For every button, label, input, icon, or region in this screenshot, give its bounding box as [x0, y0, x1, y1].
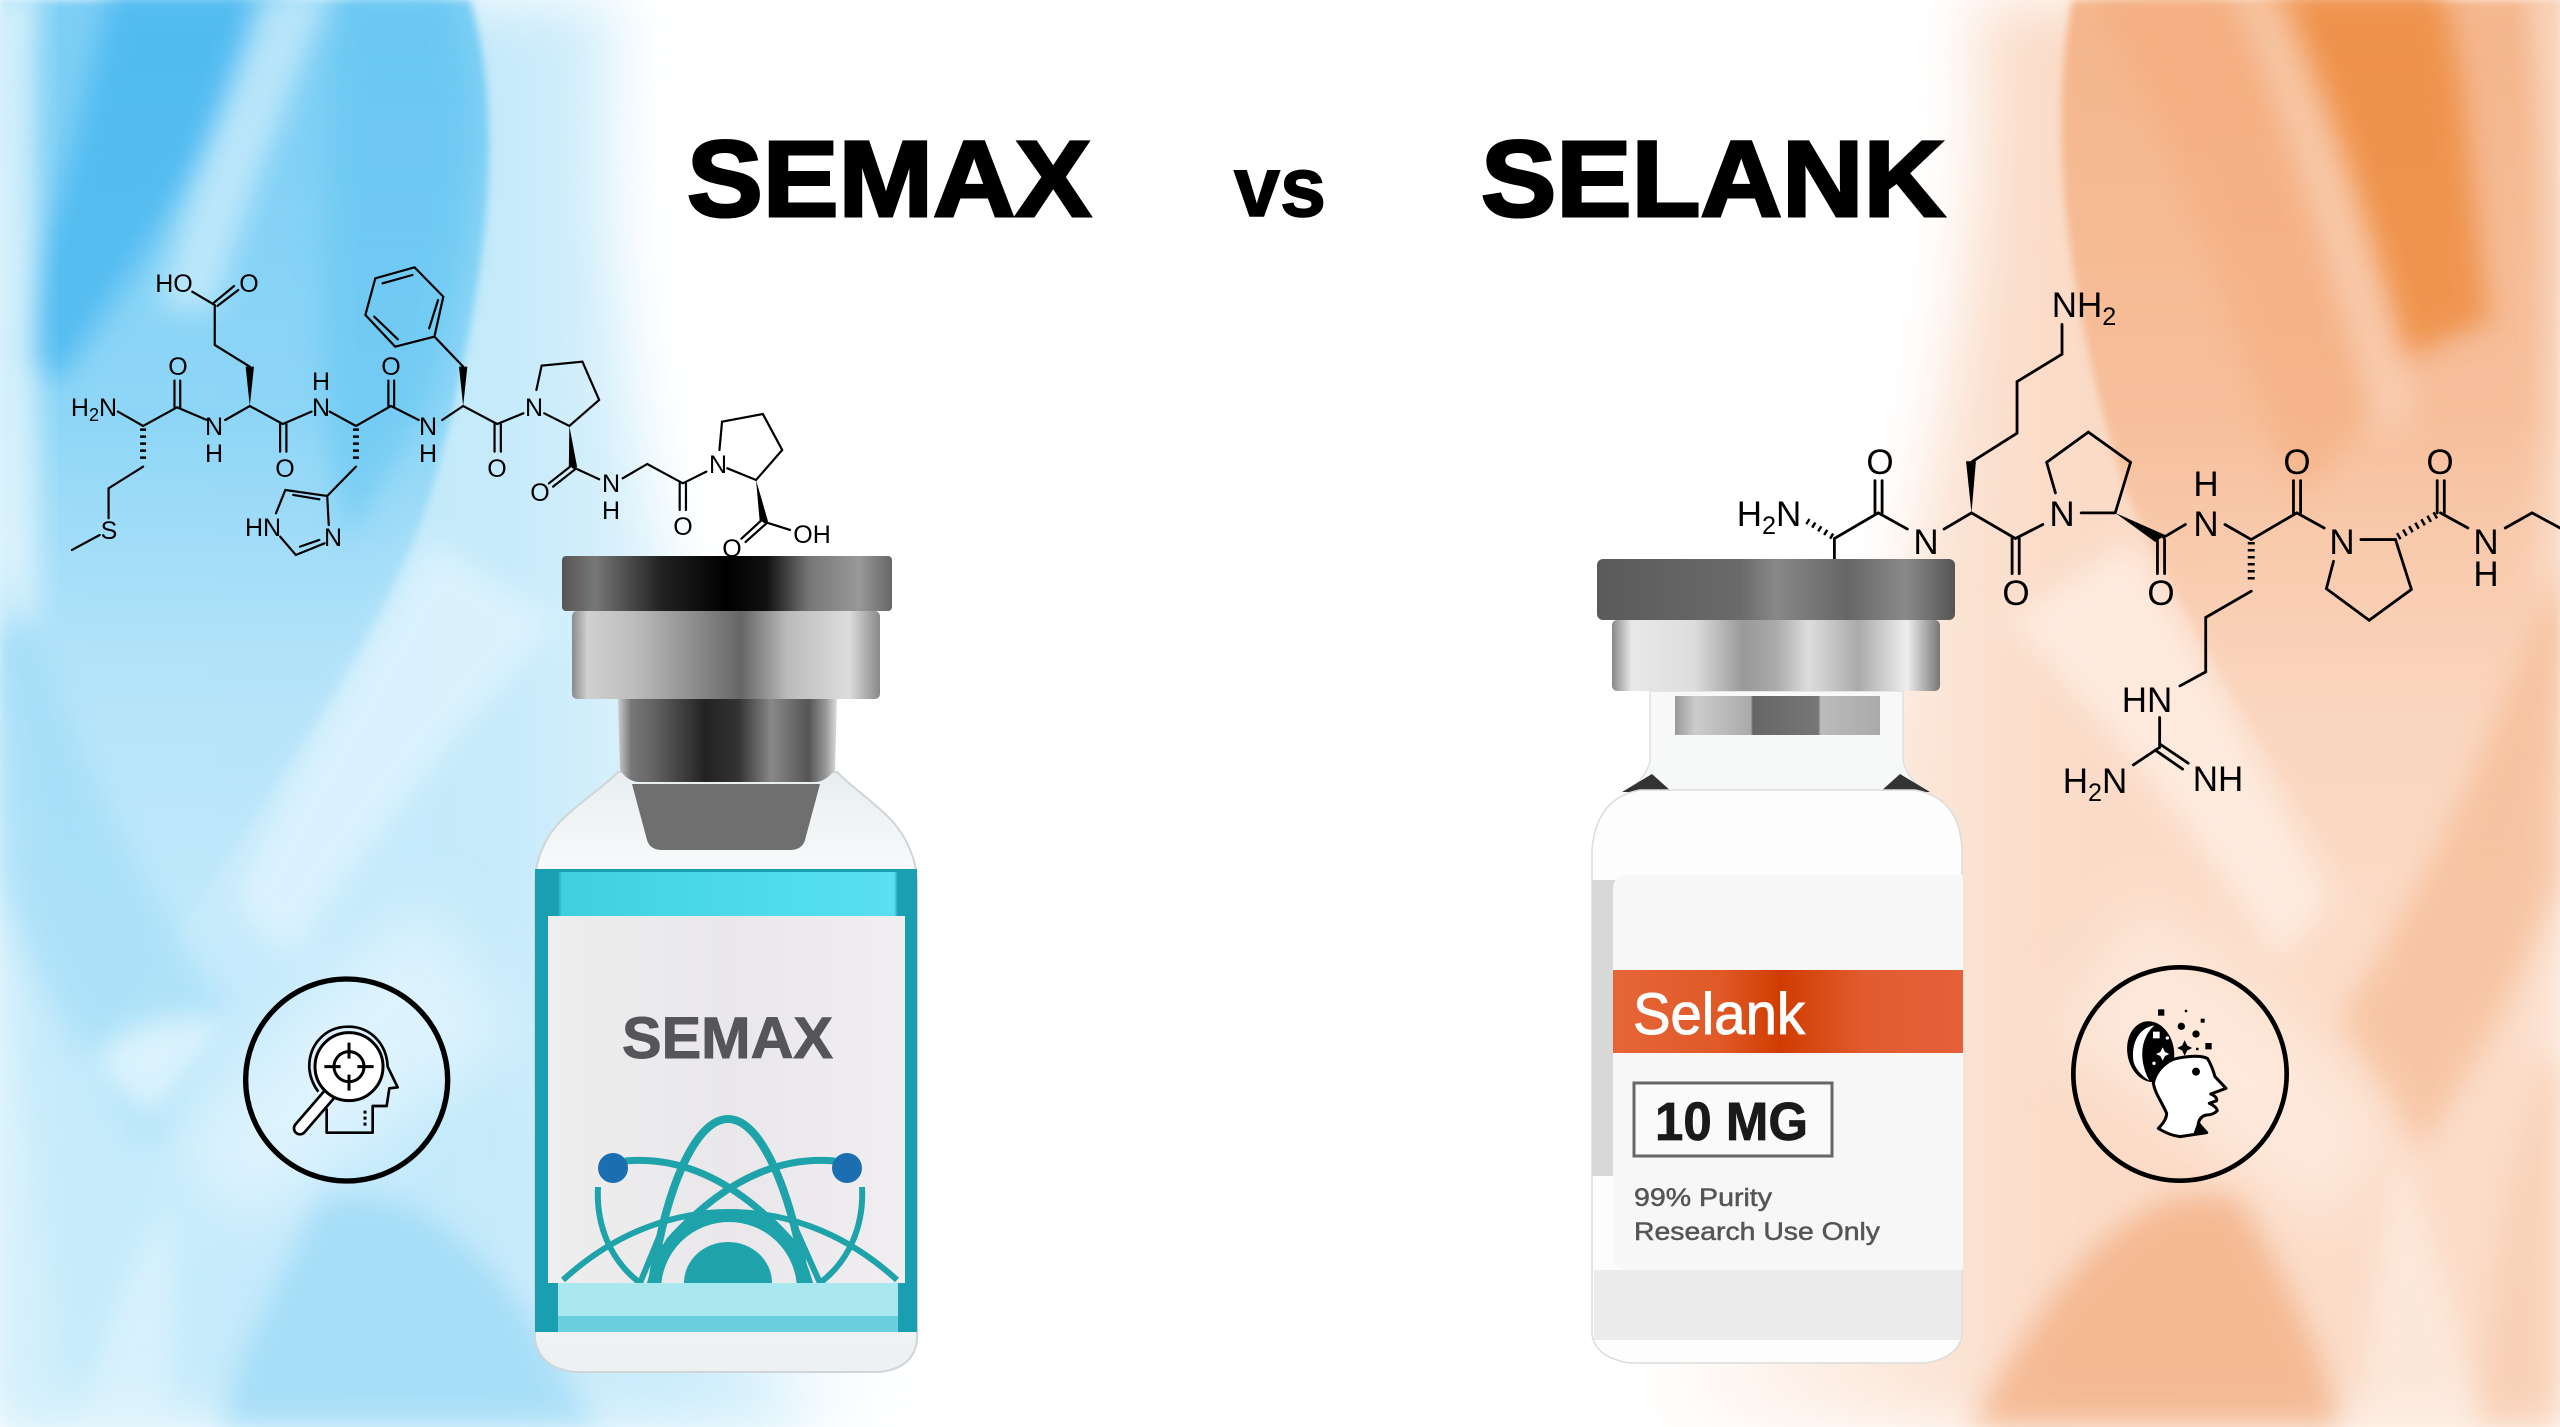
chemical structure: Semax peptide: HO	[155, 270, 193, 298]
label: Selank: Selank	[1633, 982, 1806, 1047]
dosage text: 10 MG	[1655, 1092, 1808, 1152]
vial: Semax	[535, 556, 917, 1372]
label text: SEMAX	[622, 1006, 833, 1071]
research use text: Research Use Only	[1634, 1218, 1881, 1246]
chemical structure: Semax peptide: N	[709, 451, 727, 479]
chemical structure: Semax peptide: O	[275, 455, 295, 483]
chemical structure: Semax peptide: H	[419, 440, 437, 468]
icon: open head with stars	[2073, 967, 2287, 1181]
title: SELANK: SELANK	[1481, 118, 1945, 239]
chemical structure: Selank peptide: O	[2147, 574, 2175, 613]
chemical structure: Semax peptide: H	[71, 394, 89, 422]
magnifier handle	[300, 1092, 332, 1128]
title: SEMAX: SEMAX	[687, 118, 1091, 239]
chemical structure: Selank peptide: N	[1776, 495, 1801, 534]
brain flap	[2122, 1017, 2179, 1086]
chemical structure: Semax peptide: O	[381, 353, 401, 381]
stopper	[632, 784, 820, 850]
chemical structure: Selank peptide: HN	[2122, 681, 2172, 720]
chemical structure: Selank peptide: 2	[2102, 303, 2116, 331]
chemical structure: Semax peptide: OH	[793, 521, 831, 549]
chemical structure: Semax peptide: HN	[245, 514, 281, 542]
chemical structure: Selank peptide: O	[1866, 443, 1894, 482]
flap stars	[2153, 1032, 2160, 1038]
chemical structure: Selank peptide: N	[2329, 523, 2355, 562]
chemical structure: Selank peptide: H	[2473, 555, 2499, 594]
chemical structure: Semax peptide: N	[312, 394, 330, 422]
chemical structure: Semax peptide	[71, 267, 831, 563]
background: orange wave panel	[1640, 0, 2560, 1427]
crescent	[2133, 1025, 2154, 1081]
vial: Selank	[1592, 559, 1963, 1363]
chemical structure: Semax peptide: O	[722, 535, 742, 563]
chemical structure: Semax peptide: O	[530, 479, 550, 507]
neck metal	[1675, 696, 1880, 735]
head outline	[309, 1027, 398, 1133]
chemical structure: Selank peptide: N	[2193, 505, 2219, 544]
neck	[618, 699, 837, 782]
chemical structure: Selank peptide: N	[1913, 523, 1939, 562]
eye	[2192, 1068, 2200, 1076]
background: blue wave panel	[0, 0, 900, 1427]
electron right	[832, 1153, 862, 1183]
chemical structure: Semax peptide: N	[324, 524, 342, 552]
chemical structure: Selank peptide: O	[2002, 574, 2030, 613]
chemical structure: Selank peptide: H	[1737, 495, 1762, 534]
chemical structure: Selank peptide: O	[2283, 443, 2311, 482]
shoulder shadow right	[1880, 774, 1930, 792]
chemical structure: Semax peptide: N	[602, 470, 620, 498]
head shadow	[2193, 1120, 2207, 1134]
bottom glass shadow	[1594, 1270, 1961, 1340]
chemical structure: Semax peptide: H	[205, 440, 223, 468]
chemical structure: Semax peptide: O	[168, 353, 188, 381]
neck dots	[360, 1111, 369, 1126]
chemical structure: Semax peptide: S	[101, 517, 117, 545]
purity text: 99% Purity	[1634, 1184, 1773, 1212]
liquid	[535, 869, 917, 1332]
chemical structure: Semax peptide: N	[99, 394, 117, 422]
chemical structure: Selank peptide: N	[2102, 762, 2127, 801]
atom logo	[563, 1119, 897, 1290]
chemical structure: Semax peptide: H	[602, 497, 620, 525]
chemical structure: Semax peptide: O	[487, 455, 507, 483]
crosshair	[324, 1043, 374, 1091]
shoulder shadow left	[1622, 774, 1672, 792]
chemical structure: Semax peptide: N	[525, 394, 543, 422]
chemical structure: Semax peptide: N	[419, 413, 437, 441]
cap ring	[572, 611, 880, 699]
chemical structure: Semax peptide: O	[239, 270, 259, 298]
chemical structure: Selank peptide: 2	[1762, 512, 1776, 540]
icon ring	[2073, 967, 2287, 1181]
chemical structure: Selank peptide	[1737, 286, 2560, 807]
orange band	[1613, 970, 1963, 1053]
left strip	[1592, 880, 1616, 1176]
neck glass	[1628, 691, 1925, 792]
chemical structure: Selank peptide: NH	[2193, 760, 2243, 799]
title: vs: vs	[1234, 140, 1326, 235]
cap top	[562, 556, 892, 611]
chemical structure: Semax peptide: N	[205, 413, 223, 441]
cap top	[1597, 559, 1955, 620]
label	[548, 916, 905, 1283]
chemical structure: Semax peptide: H	[312, 368, 330, 396]
lens	[315, 1033, 383, 1101]
chemical structure: Selank peptide: H	[2063, 762, 2088, 801]
icon: head with magnifier and target	[246, 979, 448, 1181]
chemical structure: Selank peptide: O	[2426, 443, 2454, 482]
chemical structure: Semax peptide: O	[673, 513, 693, 541]
chemical structure: Selank peptide: N	[2049, 495, 2075, 534]
glass body	[535, 772, 917, 1372]
dosage box	[1634, 1083, 1832, 1156]
floating particles	[2158, 1009, 2212, 1054]
glass body	[1592, 790, 1962, 1363]
cap ring	[1612, 620, 1940, 691]
head	[2153, 1056, 2226, 1137]
electron left	[598, 1153, 628, 1183]
icon ring	[246, 979, 448, 1181]
chemical structure: Semax peptide: 2	[89, 405, 99, 425]
chemical structure: Selank peptide: N	[2473, 523, 2499, 562]
chemical structure: Selank peptide: 2	[2088, 779, 2102, 807]
chemical structure: Selank peptide: NH	[2052, 286, 2102, 325]
label	[1613, 875, 1963, 1270]
chemical structure: Selank peptide: H	[2193, 465, 2219, 504]
